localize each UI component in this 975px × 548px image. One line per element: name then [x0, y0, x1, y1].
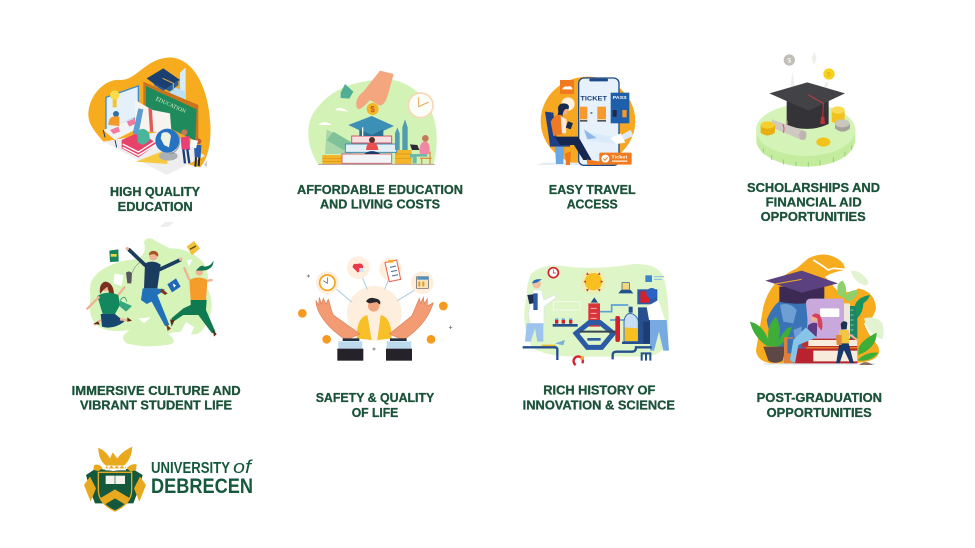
- panel: easy travel access: [537, 77, 636, 212]
- heading: safety and quality of life: SAFETY & QUALITY: [316, 391, 435, 405]
- heading: scholarships: [747, 181, 880, 224]
- heading: safety and quality of life: [316, 391, 435, 420]
- panel: scholarships: [747, 52, 880, 224]
- heading: post-graduation: OPPORTUNITIES: [767, 406, 872, 420]
- heading: innovation and science: INNOVATION & SCIENCE: [523, 398, 675, 412]
- heading: culture and student life: VIBRANT STUDENT LIFE: [80, 398, 232, 412]
- heading: culture and student life: [72, 384, 241, 412]
- panel: affordable education: [297, 71, 463, 212]
- heading: innovation and science: RICH HISTORY OF: [543, 384, 656, 398]
- icon: education isometric scene: [88, 57, 211, 175]
- heading: affordable education: [297, 183, 463, 212]
- panel: culture and student life: [72, 238, 241, 412]
- heading: affordable education: AND LIVING COSTS: [320, 198, 440, 212]
- wordmark: university of debrecen: [151, 457, 253, 498]
- icon: jumping students: [87, 238, 217, 346]
- panel: innovation and science: [523, 264, 675, 412]
- heading: culture and student life: IMMERSIVE CULTURE AND: [72, 384, 241, 398]
- icon: graduation cap on coin disc: $: [827, 72, 831, 79]
- icon: phone ticket and traveller: PASS: [613, 95, 627, 101]
- heading: post-graduation: POST-GRADUATION: [757, 391, 882, 405]
- heading: scholarships: OPPORTUNITIES: [761, 210, 866, 224]
- heading: high quality education: HIGH QUALITY: [110, 185, 201, 199]
- icon: phone ticket and traveller: TICKET: [580, 95, 607, 102]
- heading: high quality education: [110, 185, 201, 214]
- wordmark: university of debrecen: DEBRECEN: [151, 475, 253, 498]
- heading: scholarships: SCHOLARSHIPS AND: [747, 181, 880, 195]
- icon: graduation cap on coin disc: [756, 52, 855, 167]
- heading: high quality education: EDUCATION: [118, 200, 193, 214]
- panel: high quality education: [88, 57, 211, 214]
- icon: phone ticket and traveller: Ticket: [611, 154, 628, 159]
- wordmark: university of debrecen: UNIVERSITY: [151, 460, 231, 477]
- icon: cap, books and graduates: [750, 255, 884, 365]
- heading: scholarships: FINANCIAL AID: [766, 196, 862, 210]
- panel: post-graduation opportunities: [750, 255, 884, 420]
- icon: coat of arms: [84, 447, 146, 511]
- heading: safety and quality of life: OF LIFE: [352, 406, 398, 420]
- wordmark: university of debrecen: of: [233, 457, 253, 477]
- icon: education isometric scene: EDUCATION: [155, 96, 187, 115]
- heading: innovation and science: [523, 384, 675, 412]
- heading: easy travel access: [549, 183, 636, 212]
- icon: hand, coin and books: [308, 71, 437, 164]
- icon: caring hands and person: [298, 256, 452, 361]
- heading: affordable education: AFFORDABLE EDUCATION: [297, 183, 463, 197]
- logo: university of debrecen: [84, 447, 253, 511]
- icon: hand, coin and books: $: [370, 105, 375, 114]
- heading: easy travel access: EASY TRAVEL: [549, 183, 636, 197]
- icon: science laboratory: [523, 264, 669, 365]
- icon: phone ticket and traveller: [537, 77, 635, 165]
- panel: safety and quality of life: [298, 256, 452, 420]
- icon: graduation cap on coin disc: $: [787, 58, 791, 65]
- heading: post-graduation: [757, 391, 882, 420]
- heading: easy travel access: ACCESS: [567, 198, 618, 212]
